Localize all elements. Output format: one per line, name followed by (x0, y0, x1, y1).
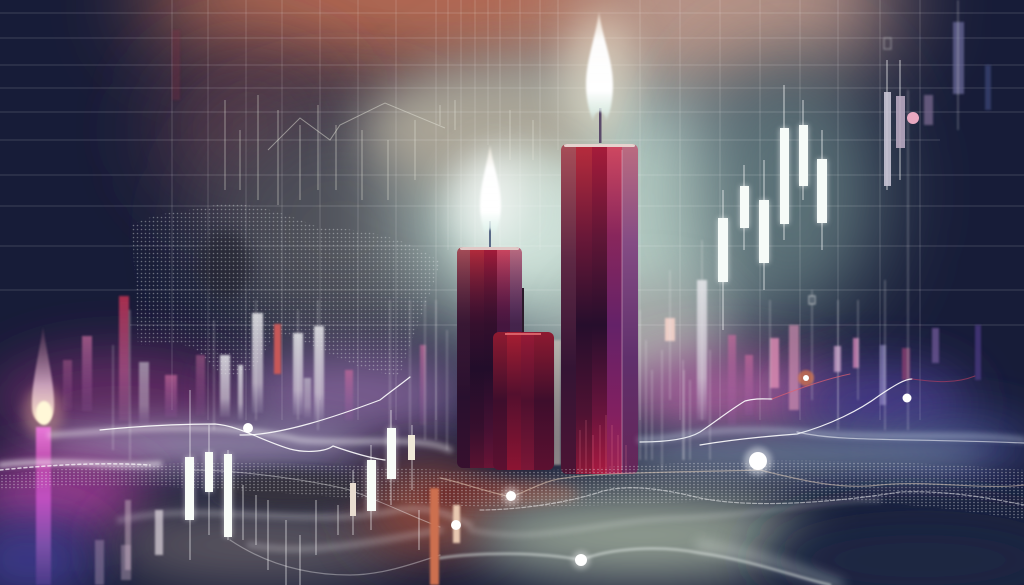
candle glow (454, 15, 638, 465)
icon: tall candle flame (586, 12, 613, 122)
dotted wave surface (0, 461, 1024, 520)
left candle (457, 145, 522, 468)
wave lines (0, 374, 1024, 585)
icon: left candle flame (480, 145, 501, 238)
dotted world map (132, 204, 440, 375)
foreground candlesticks (95, 390, 460, 585)
background candlesticks right (640, 0, 991, 470)
background candlesticks left (63, 30, 447, 460)
short front candle (493, 288, 554, 470)
glowing dots (243, 370, 912, 569)
faint line chart (225, 95, 533, 205)
grid lines (0, 0, 1024, 420)
white candlesticks right (718, 60, 919, 330)
left pink candle (23, 327, 63, 585)
tall candle (561, 12, 638, 474)
